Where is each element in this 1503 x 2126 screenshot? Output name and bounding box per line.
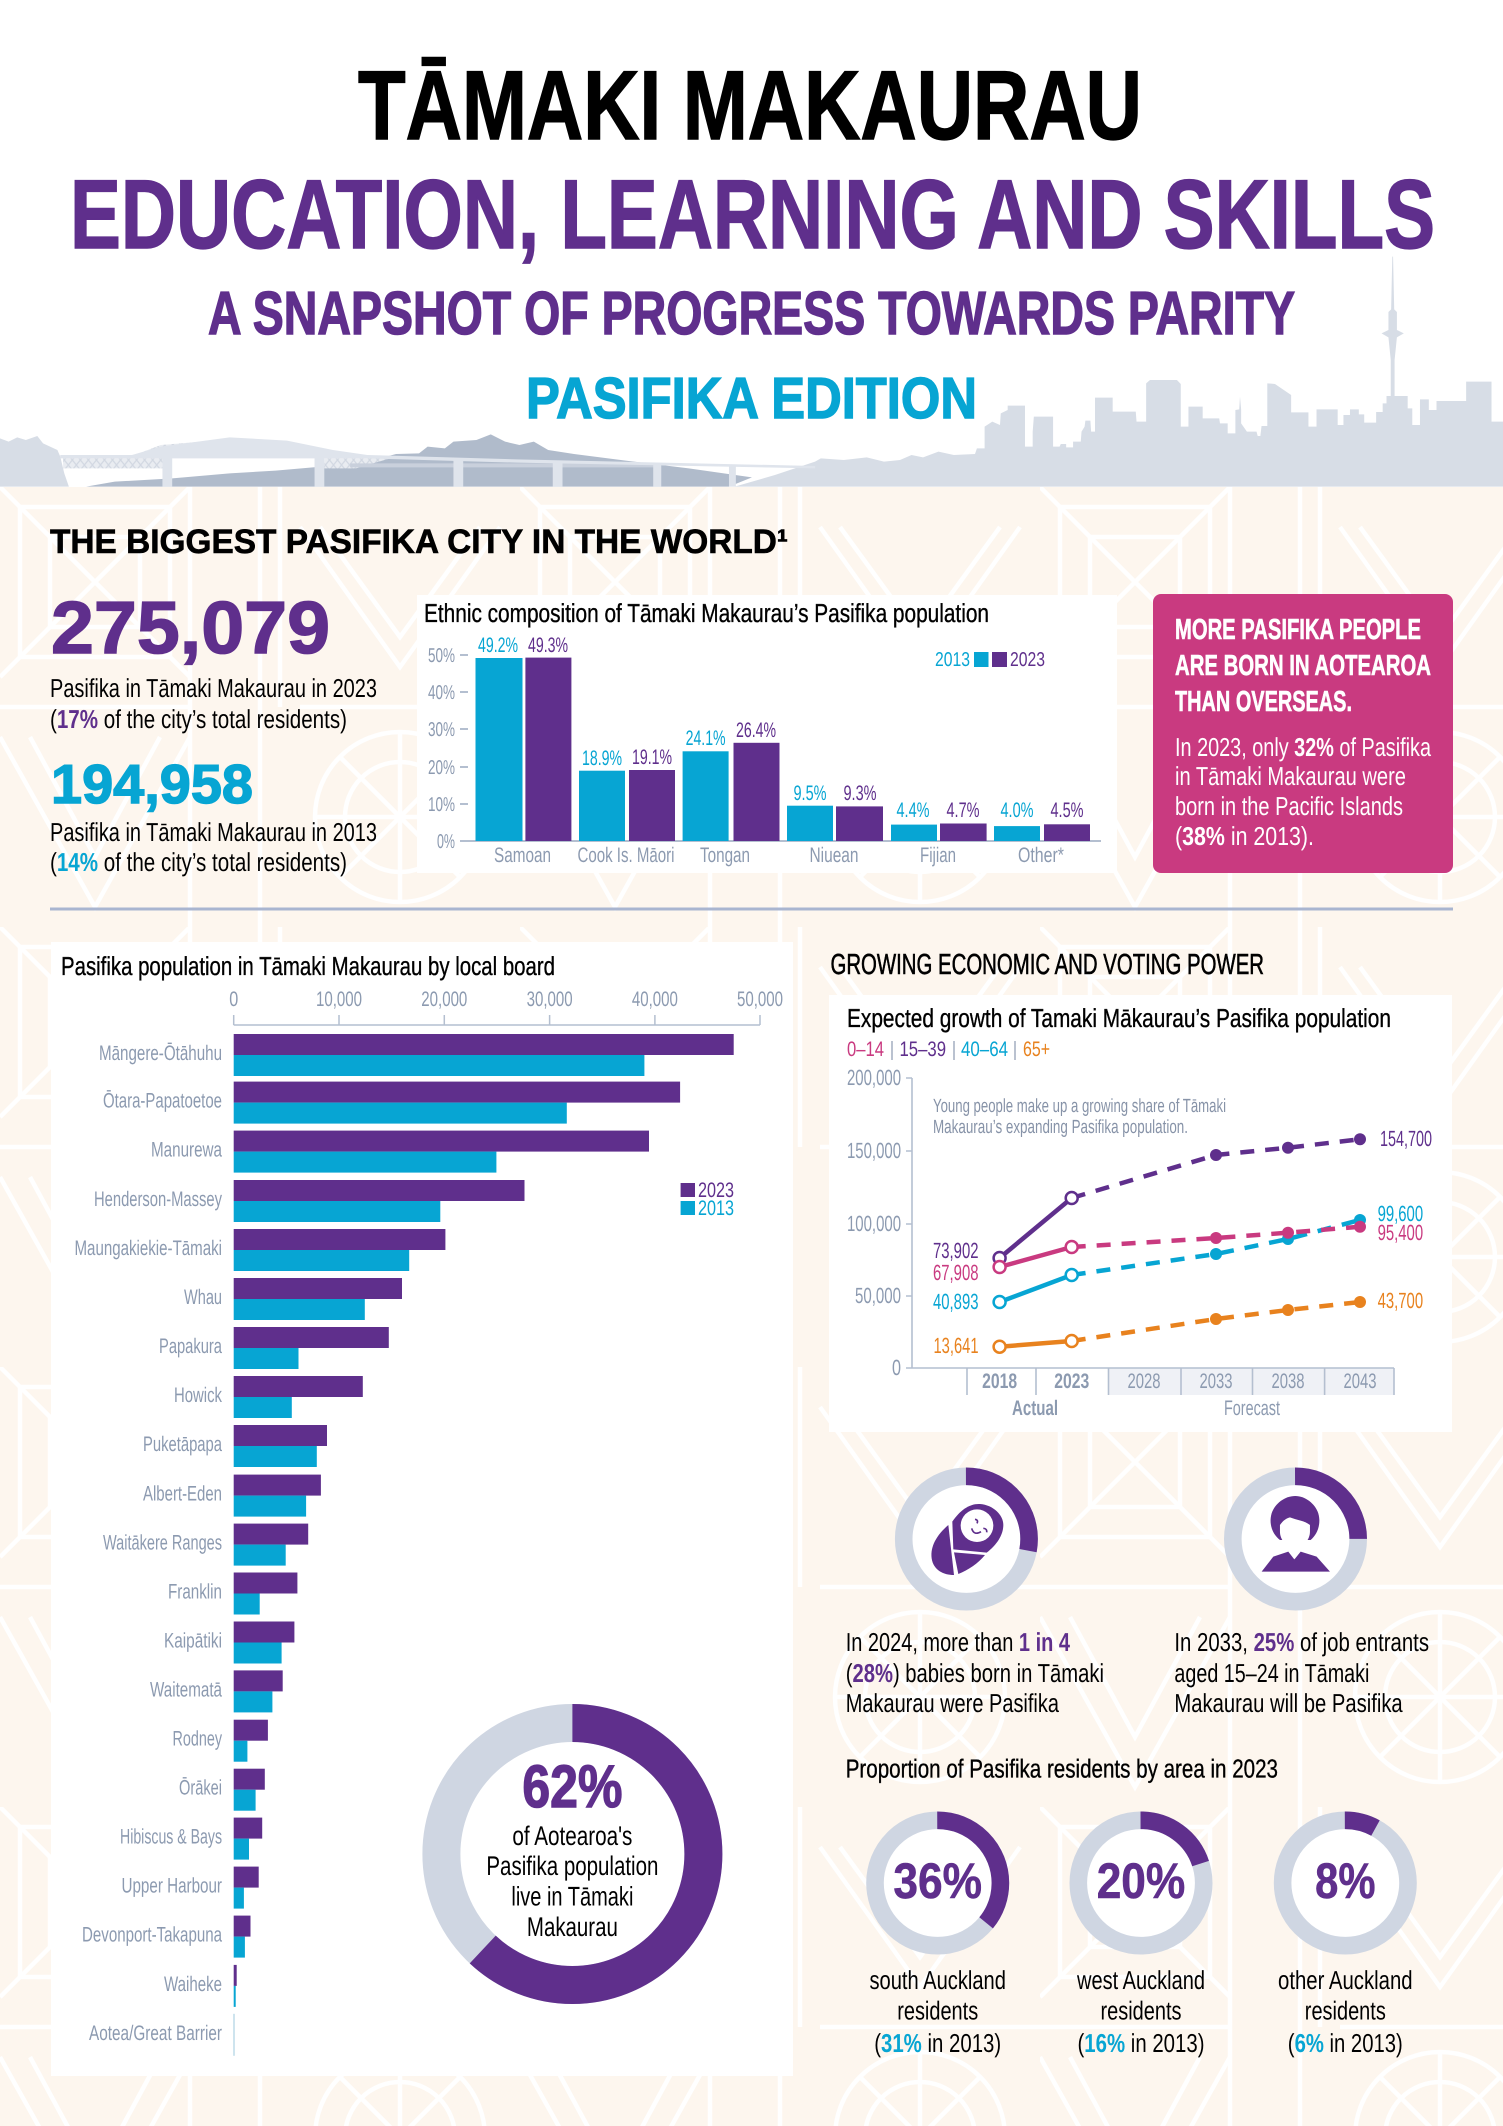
header skyline: left: [0, 434, 900, 487]
y axis: 0%: [437, 831, 455, 853]
text: job entrants: Makaurau will be Pasifika: [1174, 1688, 1403, 1718]
value labels: 4.4%: [896, 799, 930, 822]
row: Franklin: Franklin: [168, 1580, 222, 1604]
row: Franklin: [168, 1572, 297, 1614]
row: Māngere-Ōtāhuhu: [99, 1034, 734, 1076]
y axis: 40%: [428, 682, 455, 704]
row: Waiheke: [164, 1965, 237, 2007]
line: 65 plus: [994, 1296, 1366, 1353]
text: job entrants: aged 15–24 in Tāmaki: [1174, 1658, 1369, 1688]
donut: other Auckland: 8%: [1315, 1853, 1375, 1909]
donut: 62 percent: Pasifika population: [486, 1851, 658, 1881]
end values: [1378, 1126, 1432, 1313]
text: west Auckland: (16% in 2013): [1078, 2028, 1204, 2058]
text: babies: (28%) babies born in Tāmaki: [846, 1658, 1104, 1688]
value labels: [478, 634, 1084, 822]
text: babies: Makaurau were Pasifika: [846, 1688, 1059, 1718]
value labels: 4.0%: [1000, 799, 1034, 822]
row: Māngere-Ōtāhuhu: Māngere-Ōtāhuhu: [99, 1042, 222, 1065]
line: 0-14: [994, 1221, 1366, 1273]
x axis: 40,000: [632, 988, 678, 1011]
donut: south Auckland: 36%: [893, 1853, 982, 1909]
value labels: 18.9%: [582, 747, 622, 770]
line: 40-64: [994, 1214, 1366, 1308]
category labels: Tongan: [700, 844, 750, 867]
donut: babies 28 percent: [904, 1476, 1029, 1602]
text: job entrants: In 2033, 25% of job entrants: [1174, 1627, 1429, 1657]
row: Waitematā: Waitematā: [150, 1678, 222, 1701]
axes: 0: [892, 1355, 901, 1380]
start values: 40,893: [933, 1289, 978, 1314]
category labels: [494, 844, 1064, 867]
stat: 2023 population: [50, 586, 377, 734]
stat: 2013 population: (14% of the city’s total residents): [50, 847, 347, 877]
value labels: 4.7%: [946, 799, 980, 822]
y axis: [428, 645, 1101, 853]
section heading: biggest Pasifika city: THE BIGGEST PASIFIKA CITY IN THE WORLD¹: [50, 523, 788, 561]
category labels: Samoan: [494, 844, 551, 867]
donut: 62 percent: live in Tāmaki: [511, 1882, 633, 1912]
bars: 2023: [525, 658, 1090, 841]
y axis: 50%: [428, 645, 455, 667]
row: Albert-Eden: Albert-Eden: [143, 1483, 222, 1506]
start values: 73,902: [933, 1238, 978, 1263]
row: Ōtara-Papatoetoe: [103, 1082, 680, 1124]
text: south Auckland: residents: [897, 1996, 978, 2026]
background pattern: [0, 487, 1503, 2126]
y axis: 20%: [428, 757, 455, 779]
edition label: PASIFIKA EDITION: [526, 366, 977, 431]
section heading: economic and voting power: GROWING ECONOMIC AND VOTING POWER: [830, 949, 1264, 981]
row: Whau: [184, 1278, 402, 1320]
year labels: Forecast: [1224, 1397, 1280, 1420]
text: babies: In 2024, more than 1 in 4: [846, 1627, 1070, 1657]
row: Devonport-Takapuna: [82, 1916, 250, 1958]
x axis: 0: [229, 988, 238, 1011]
row: Papakura: Papakura: [159, 1335, 222, 1358]
donut: west Auckland: [1078, 1820, 1204, 1946]
legend: 2013: [698, 1197, 734, 1220]
city skyline: [900, 380, 1503, 487]
row: Manurewa: Manurewa: [151, 1139, 222, 1162]
value labels: 26.4%: [736, 719, 776, 742]
row: Kaipātiki: Kaipātiki: [164, 1630, 222, 1652]
end values: 95,400: [1378, 1220, 1423, 1245]
row: Rodney: [172, 1720, 268, 1762]
panel: ethnic composition chart: [417, 595, 1117, 873]
text: south Auckland: [869, 1965, 1006, 2058]
y axis: 30%: [428, 719, 455, 741]
row: Kaipātiki: [164, 1622, 294, 1664]
category labels: Fijian: [920, 844, 956, 867]
text: babies: [846, 1627, 1104, 1718]
sky tower: [1382, 257, 1404, 397]
icon: person: [1262, 1496, 1330, 1572]
row: Waiheke: Waiheke: [164, 1973, 222, 1996]
chart title: Pasifika population in Tāmaki Makaurau by local board: [61, 951, 555, 981]
row: Puketāpapa: [143, 1425, 327, 1467]
year labels: Actual: [1012, 1397, 1058, 1420]
age legend: 15–39: [900, 1038, 946, 1061]
legend: 2013: [935, 649, 970, 671]
value labels: 9.3%: [844, 782, 876, 805]
age legend: 65+: [1023, 1038, 1050, 1061]
axes: [847, 1065, 1394, 1395]
category labels: Other*: [1018, 844, 1064, 867]
value labels: 49.3%: [528, 634, 568, 657]
text: job entrants: [1174, 1627, 1429, 1718]
year labels: 2043: [1344, 1370, 1376, 1393]
row: Manurewa: [151, 1131, 649, 1173]
callout: born in Aotearoa: In 2023, only 32% of Pasifika: [1175, 732, 1431, 762]
legend: [681, 1179, 734, 1220]
row: Upper Harbour: [122, 1867, 259, 1909]
text: other Auckland: other Auckland: [1278, 1965, 1413, 1995]
end values: 154,700: [1380, 1126, 1432, 1151]
x axis: 50,000: [737, 988, 783, 1011]
donut: other Auckland: [1283, 1820, 1408, 1946]
stat: 2013 population: Pasifika in Tāmaki Makaurau in 2013: [50, 817, 377, 847]
donut: west Auckland: 20%: [1097, 1853, 1185, 1909]
start values: 67,908: [933, 1260, 978, 1285]
axes: 150,000: [847, 1138, 901, 1163]
stat: 2023 population: Pasifika in Tāmaki Makaurau in 2023: [50, 673, 377, 703]
end values: 99,600: [1378, 1201, 1423, 1226]
year labels: [982, 1370, 1376, 1420]
row: Waitematā: [150, 1670, 283, 1712]
row: Whau: Whau: [184, 1286, 222, 1309]
row: Ōtara-Papatoetoe: Ōtara-Papatoetoe: [103, 1090, 222, 1113]
row: Hibiscus & Bays: [120, 1818, 262, 1860]
row: Henderson-Massey: [94, 1180, 524, 1222]
text: west Auckland: [1076, 1965, 1205, 2058]
year labels: 2018: [982, 1370, 1017, 1393]
text: south Auckland: (31% in 2013): [874, 2028, 1001, 2058]
donut: 62 percent: 62%: [522, 1753, 622, 1820]
text: west Auckland: west Auckland: [1076, 1965, 1205, 1995]
donut: south Auckland: [875, 1820, 1000, 1946]
row: Albert-Eden: [143, 1475, 321, 1517]
text: west Auckland: residents: [1100, 1996, 1182, 2026]
callout: born in Aotearoa: (38% in 2013).: [1175, 821, 1314, 851]
left headland: [0, 436, 69, 487]
row: Aotea/Great Barrier: Aotea/Great Barrier: [89, 2022, 222, 2045]
donut: 62 percent: of Aotearoa's: [512, 1821, 632, 1851]
heading: proportion by area: Proportion of Pasifika residents by area in 2023: [846, 1754, 1278, 1784]
panel: expected growth line chart: [829, 995, 1452, 1432]
age legend: 0–14: [847, 1038, 884, 1061]
text: south Auckland: south Auckland: [869, 1965, 1006, 1995]
harbour bridge: [60, 437, 815, 487]
y axis: 10%: [428, 794, 455, 816]
annotation: [933, 1096, 1226, 1138]
row: Hibiscus & Bays: Hibiscus & Bays: [120, 1826, 222, 1849]
stat: 2013 population: 194,958: [51, 753, 253, 815]
forecast shading: [1108, 1368, 1394, 1395]
x axis: 30,000: [527, 988, 573, 1011]
value labels: 9.5%: [794, 782, 826, 805]
row: Rodney: Rodney: [172, 1728, 222, 1751]
year labels: 2028: [1128, 1370, 1160, 1393]
chart title: Ethnic composition of Tāmaki Makaurau’s Pasifika population: [424, 598, 989, 628]
x axis: [229, 988, 783, 1025]
row: Papakura: [159, 1327, 389, 1369]
row: Maungakiekie-Tāmaki: Maungakiekie-Tāmaki: [74, 1237, 222, 1260]
donut: 62 percent: [441, 1723, 703, 1985]
value labels: 49.2%: [478, 634, 518, 657]
header skyline: right: [900, 257, 1503, 487]
row: Ōrākei: [179, 1769, 265, 1811]
legend: 2023: [1010, 649, 1045, 671]
bars: 2013: [476, 658, 1040, 841]
row: Howick: Howick: [174, 1384, 222, 1407]
row: Puketāpapa: Puketāpapa: [143, 1433, 222, 1456]
stat: 2013 population: [50, 753, 377, 877]
hills: [86, 434, 752, 487]
east land: [735, 457, 900, 487]
donut: 62 percent: Makaurau: [527, 1912, 618, 1942]
legend: 2023: [698, 1179, 734, 1202]
stat: 2023 population: (17% of the city’s total residents): [50, 704, 347, 734]
line: 15-39: [994, 1133, 1366, 1264]
legend: [935, 649, 1045, 671]
end values: 43,700: [1378, 1288, 1423, 1313]
value labels: 19.1%: [632, 746, 672, 769]
annotation: Young people make up a growing share of Tāmaki: [933, 1096, 1226, 1117]
year labels: 2023: [1054, 1370, 1089, 1393]
age legend: [847, 1038, 1050, 1061]
title: TĀMAKI MAKAURAU: [358, 50, 1142, 160]
text: other Auckland: (6% in 2013): [1288, 2028, 1403, 2058]
row: Ōrākei: Ōrākei: [179, 1777, 222, 1800]
callout: born in Aotearoa: [1153, 594, 1453, 873]
callout: born in Aotearoa: in Tāmaki Makaurau were: [1175, 761, 1406, 791]
row: Henderson-Massey: Henderson-Massey: [94, 1188, 222, 1211]
axes: 200,000: [847, 1065, 901, 1090]
donut: job entrants 25 percent: [1233, 1476, 1358, 1602]
row: Maungakiekie-Tāmaki: [74, 1229, 445, 1271]
row: Howick: [174, 1376, 363, 1418]
start values: [933, 1238, 978, 1358]
year labels: 2033: [1200, 1370, 1232, 1393]
icon: swaddled baby: [931, 1504, 1003, 1575]
x axis: 20,000: [421, 988, 467, 1011]
panel: population by local board: [51, 942, 793, 2076]
value labels: 24.1%: [686, 727, 726, 750]
text: other Auckland: [1278, 1965, 1413, 2058]
age legend: 40–64: [961, 1038, 1008, 1061]
category labels: Niuean: [810, 844, 858, 867]
x axis: 10,000: [316, 988, 362, 1011]
row: Devonport-Takapuna: Devonport-Takapuna: [82, 1924, 222, 1947]
axes: 50,000: [855, 1283, 901, 1308]
stat: 2023 population: 275,079: [51, 586, 330, 669]
axes: 100,000: [847, 1211, 901, 1236]
text: other Auckland: residents: [1305, 1996, 1386, 2026]
row: Upper Harbour: Upper Harbour: [122, 1875, 222, 1898]
annotation: Makaurau’s expanding Pasifika population.: [933, 1117, 1188, 1138]
row: Waitākere Ranges: [103, 1524, 308, 1566]
row: Waitākere Ranges: Waitākere Ranges: [103, 1532, 222, 1555]
start values: 13,641: [934, 1333, 978, 1358]
callout: born in Aotearoa: born in the Pacific Islands: [1175, 791, 1403, 821]
year labels: 2038: [1272, 1370, 1304, 1393]
value labels: 4.5%: [1050, 799, 1084, 822]
category labels: Cook Is. Māori: [578, 844, 674, 867]
callout: born in Aotearoa: THAN OVERSEAS.: [1175, 686, 1352, 718]
